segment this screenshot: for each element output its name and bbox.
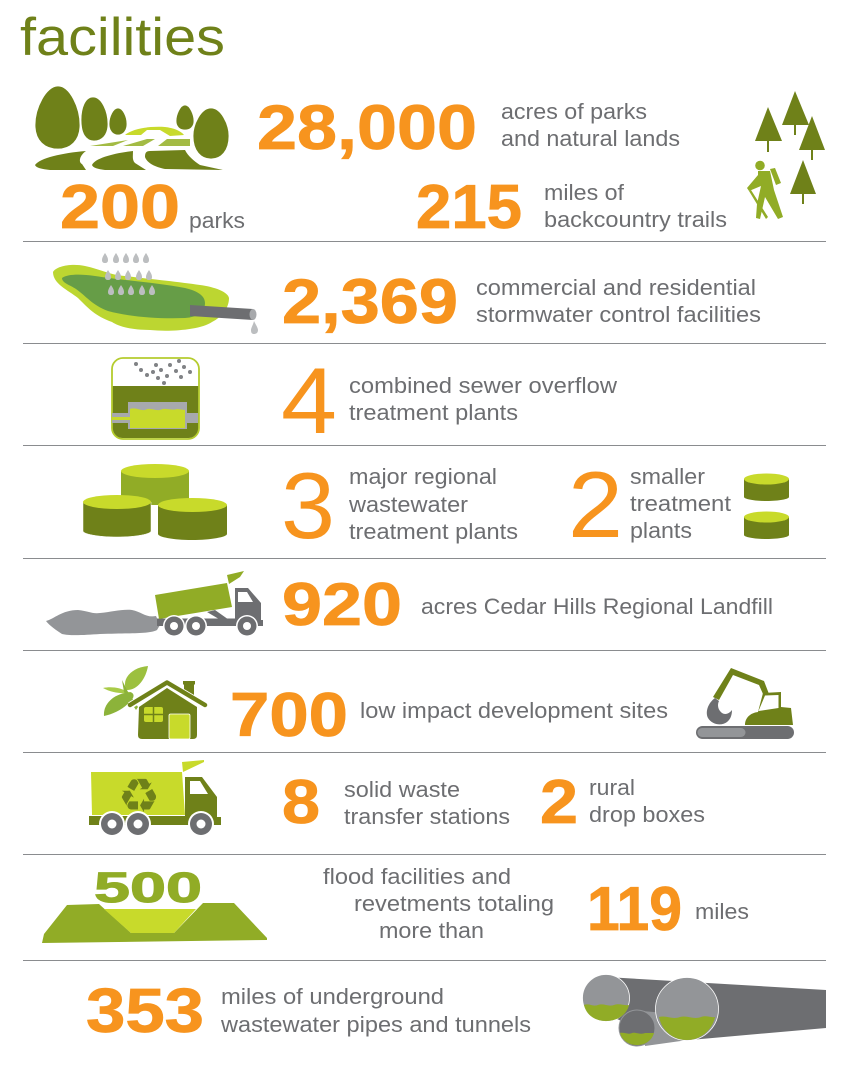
stat: 119 miles: miles (695, 899, 749, 924)
stat: 3 regional plants: major regional (349, 464, 497, 489)
icon: levee with 500 (42, 864, 267, 943)
stat: 2 rural drop boxes: drop boxes (589, 802, 705, 827)
icon: levee with 500: 500 (94, 864, 202, 912)
stat: 2 smaller plants: 2 (568, 452, 623, 557)
stat: 2 smaller plants: plants (630, 518, 692, 543)
stat: 3 regional plants: treatment plants (349, 519, 518, 544)
stat: 2 rural drop boxes: 2 (540, 768, 578, 837)
stat: 2 smaller plants (568, 452, 732, 557)
stat: 200 parks (60, 173, 245, 242)
stat: 119 miles: 119 (587, 875, 682, 944)
stat: 920 acres landfill (282, 571, 773, 638)
stat: 8 transfer stations: transfer stations (344, 804, 510, 829)
stat: 3 regional plants: wastewater (348, 492, 469, 517)
icon: park landscape (35, 86, 229, 170)
stat: 2 smaller plants: treatment (630, 491, 732, 516)
icon: house with leaves (103, 666, 205, 739)
stat: 28,000 acres (257, 93, 680, 163)
icon: dump truck with landfill (46, 571, 263, 637)
stat: 3 regional plants (281, 453, 518, 558)
stat: 215 miles of trails: miles of (544, 180, 625, 205)
stat: 2,369 stormwater facilities: commercial and residential (476, 275, 756, 300)
icon: combined sewer overflow tank (112, 358, 199, 439)
icon: stormwater pond (53, 253, 258, 334)
stat: 2 rural drop boxes: rural (589, 775, 635, 800)
text: flood facilities: flood facilities and (323, 864, 511, 889)
stat: 4 treatment plants: 4 (281, 348, 337, 453)
stat: 353 miles of pipes: wastewater pipes and tunnels (220, 1012, 531, 1037)
stat: 215 miles of trails (416, 173, 727, 242)
stat: 4 treatment plants (281, 348, 618, 453)
stat: 4 treatment plants: treatment plants (349, 400, 518, 425)
icon: trees and hiker (747, 91, 825, 219)
stat: 4 treatment plants: combined sewer overflow (349, 373, 618, 398)
stat: 700 sites (230, 681, 668, 750)
stat: 8 transfer stations: solid waste (344, 777, 460, 802)
stat: 2 smaller plants: smaller (630, 464, 706, 489)
stat: 200 parks: 200 (60, 173, 180, 242)
stat: 920 acres landfill: 920 (282, 571, 402, 638)
stat: 353 miles of pipes: 353 (86, 977, 204, 1046)
stat: 215 miles of trails: backcountry trails (544, 207, 727, 232)
stat: 3 regional plants: 3 (281, 453, 335, 558)
stat: 353 miles of pipes: miles of underground (221, 984, 444, 1009)
stat: 2,369 stormwater facilities: stormwater control facilities (476, 302, 761, 327)
title: facilities (20, 8, 225, 67)
icon: three cylinders (83, 464, 227, 540)
icon: two small cylinders (744, 474, 789, 539)
text: flood facilities (323, 864, 554, 943)
stat: 28,000 acres: and natural lands (501, 126, 680, 151)
stat: 920 acres landfill: acres Cedar Hills Regional Landfill (421, 594, 773, 619)
icon: recycling truck: ♻ (118, 769, 160, 824)
stat: 28,000 acres: acres of parks (501, 99, 647, 124)
stat: 8 transfer stations (282, 768, 510, 837)
stat: 28,000 acres: 28,000 (257, 93, 477, 163)
icon: excavator (696, 668, 794, 739)
stat: 700 sites: low impact development sites (360, 698, 668, 723)
stat: 119 miles (587, 875, 749, 944)
stat: 215 miles of trails: 215 (416, 173, 522, 242)
stat: 700 sites: 700 (230, 681, 348, 750)
stat: 2,369 stormwater facilities (282, 267, 761, 337)
icon: recycling truck (89, 760, 221, 837)
stat: 353 miles of pipes (86, 977, 531, 1046)
icon: pipes and tunnels (582, 974, 826, 1046)
stat: 2,369 stormwater facilities: 2,369 (282, 267, 458, 337)
text: flood facilities: revetments totaling (354, 891, 554, 916)
text: flood facilities: more than (379, 918, 484, 943)
stat: 2 rural drop boxes (540, 768, 705, 837)
stat: 8 transfer stations: 8 (282, 768, 320, 837)
stat: 200 parks: parks (189, 208, 245, 233)
